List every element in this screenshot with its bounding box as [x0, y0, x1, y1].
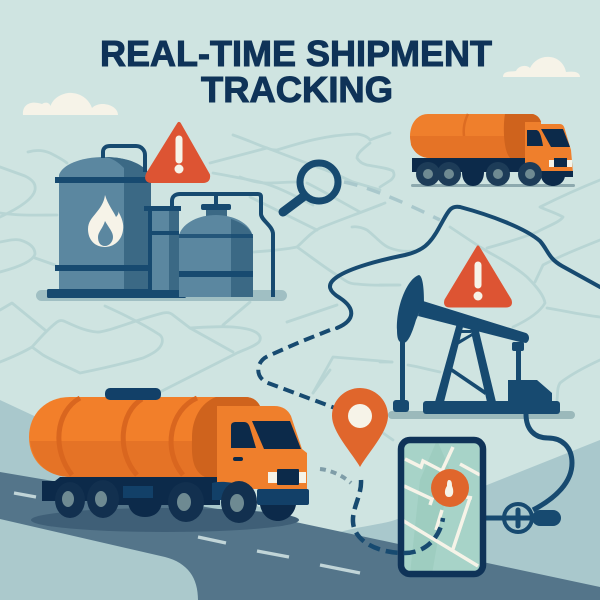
- foreground hill below road: [0, 510, 210, 600]
- middle column: [144, 206, 181, 290]
- title: [100, 33, 492, 110]
- truck shadow: [31, 508, 299, 532]
- chassis: [42, 477, 220, 505]
- tank: [29, 397, 260, 477]
- big tank: [47, 146, 186, 298]
- large tanker truck: [29, 388, 309, 532]
- location pin: [332, 388, 388, 467]
- title: REAL-TIME SHIPMENT: [100, 33, 492, 74]
- dashed route to phone: [353, 480, 443, 553]
- background hill: left: [0, 400, 305, 525]
- icon: flame: [88, 195, 123, 247]
- cloud: right: [503, 57, 580, 77]
- cloud: left: [23, 93, 118, 115]
- wheels: [55, 480, 257, 523]
- small tank: [172, 194, 273, 297]
- title: TRACKING: [201, 69, 393, 110]
- dashed route to pin: [258, 330, 335, 408]
- map roads: [402, 447, 480, 566]
- warning triangle: pump: [446, 247, 510, 306]
- faint dashed route: [344, 182, 440, 220]
- cable and plug: [486, 414, 572, 532]
- warning triangle: storage: [147, 124, 208, 181]
- oil pump jack: [388, 275, 575, 419]
- background hill: right: [330, 440, 600, 600]
- solid route line: [330, 207, 600, 328]
- faded dashed route: [320, 469, 351, 483]
- phone with map: [401, 440, 483, 574]
- storage tanks: [36, 146, 287, 301]
- small tanker truck: [410, 114, 575, 187]
- icon: magnifier: [283, 163, 338, 212]
- map marker: [431, 469, 469, 507]
- tank hatch: [105, 388, 161, 400]
- cab: [212, 406, 309, 505]
- road markings: [14, 493, 360, 573]
- road: [0, 472, 600, 600]
